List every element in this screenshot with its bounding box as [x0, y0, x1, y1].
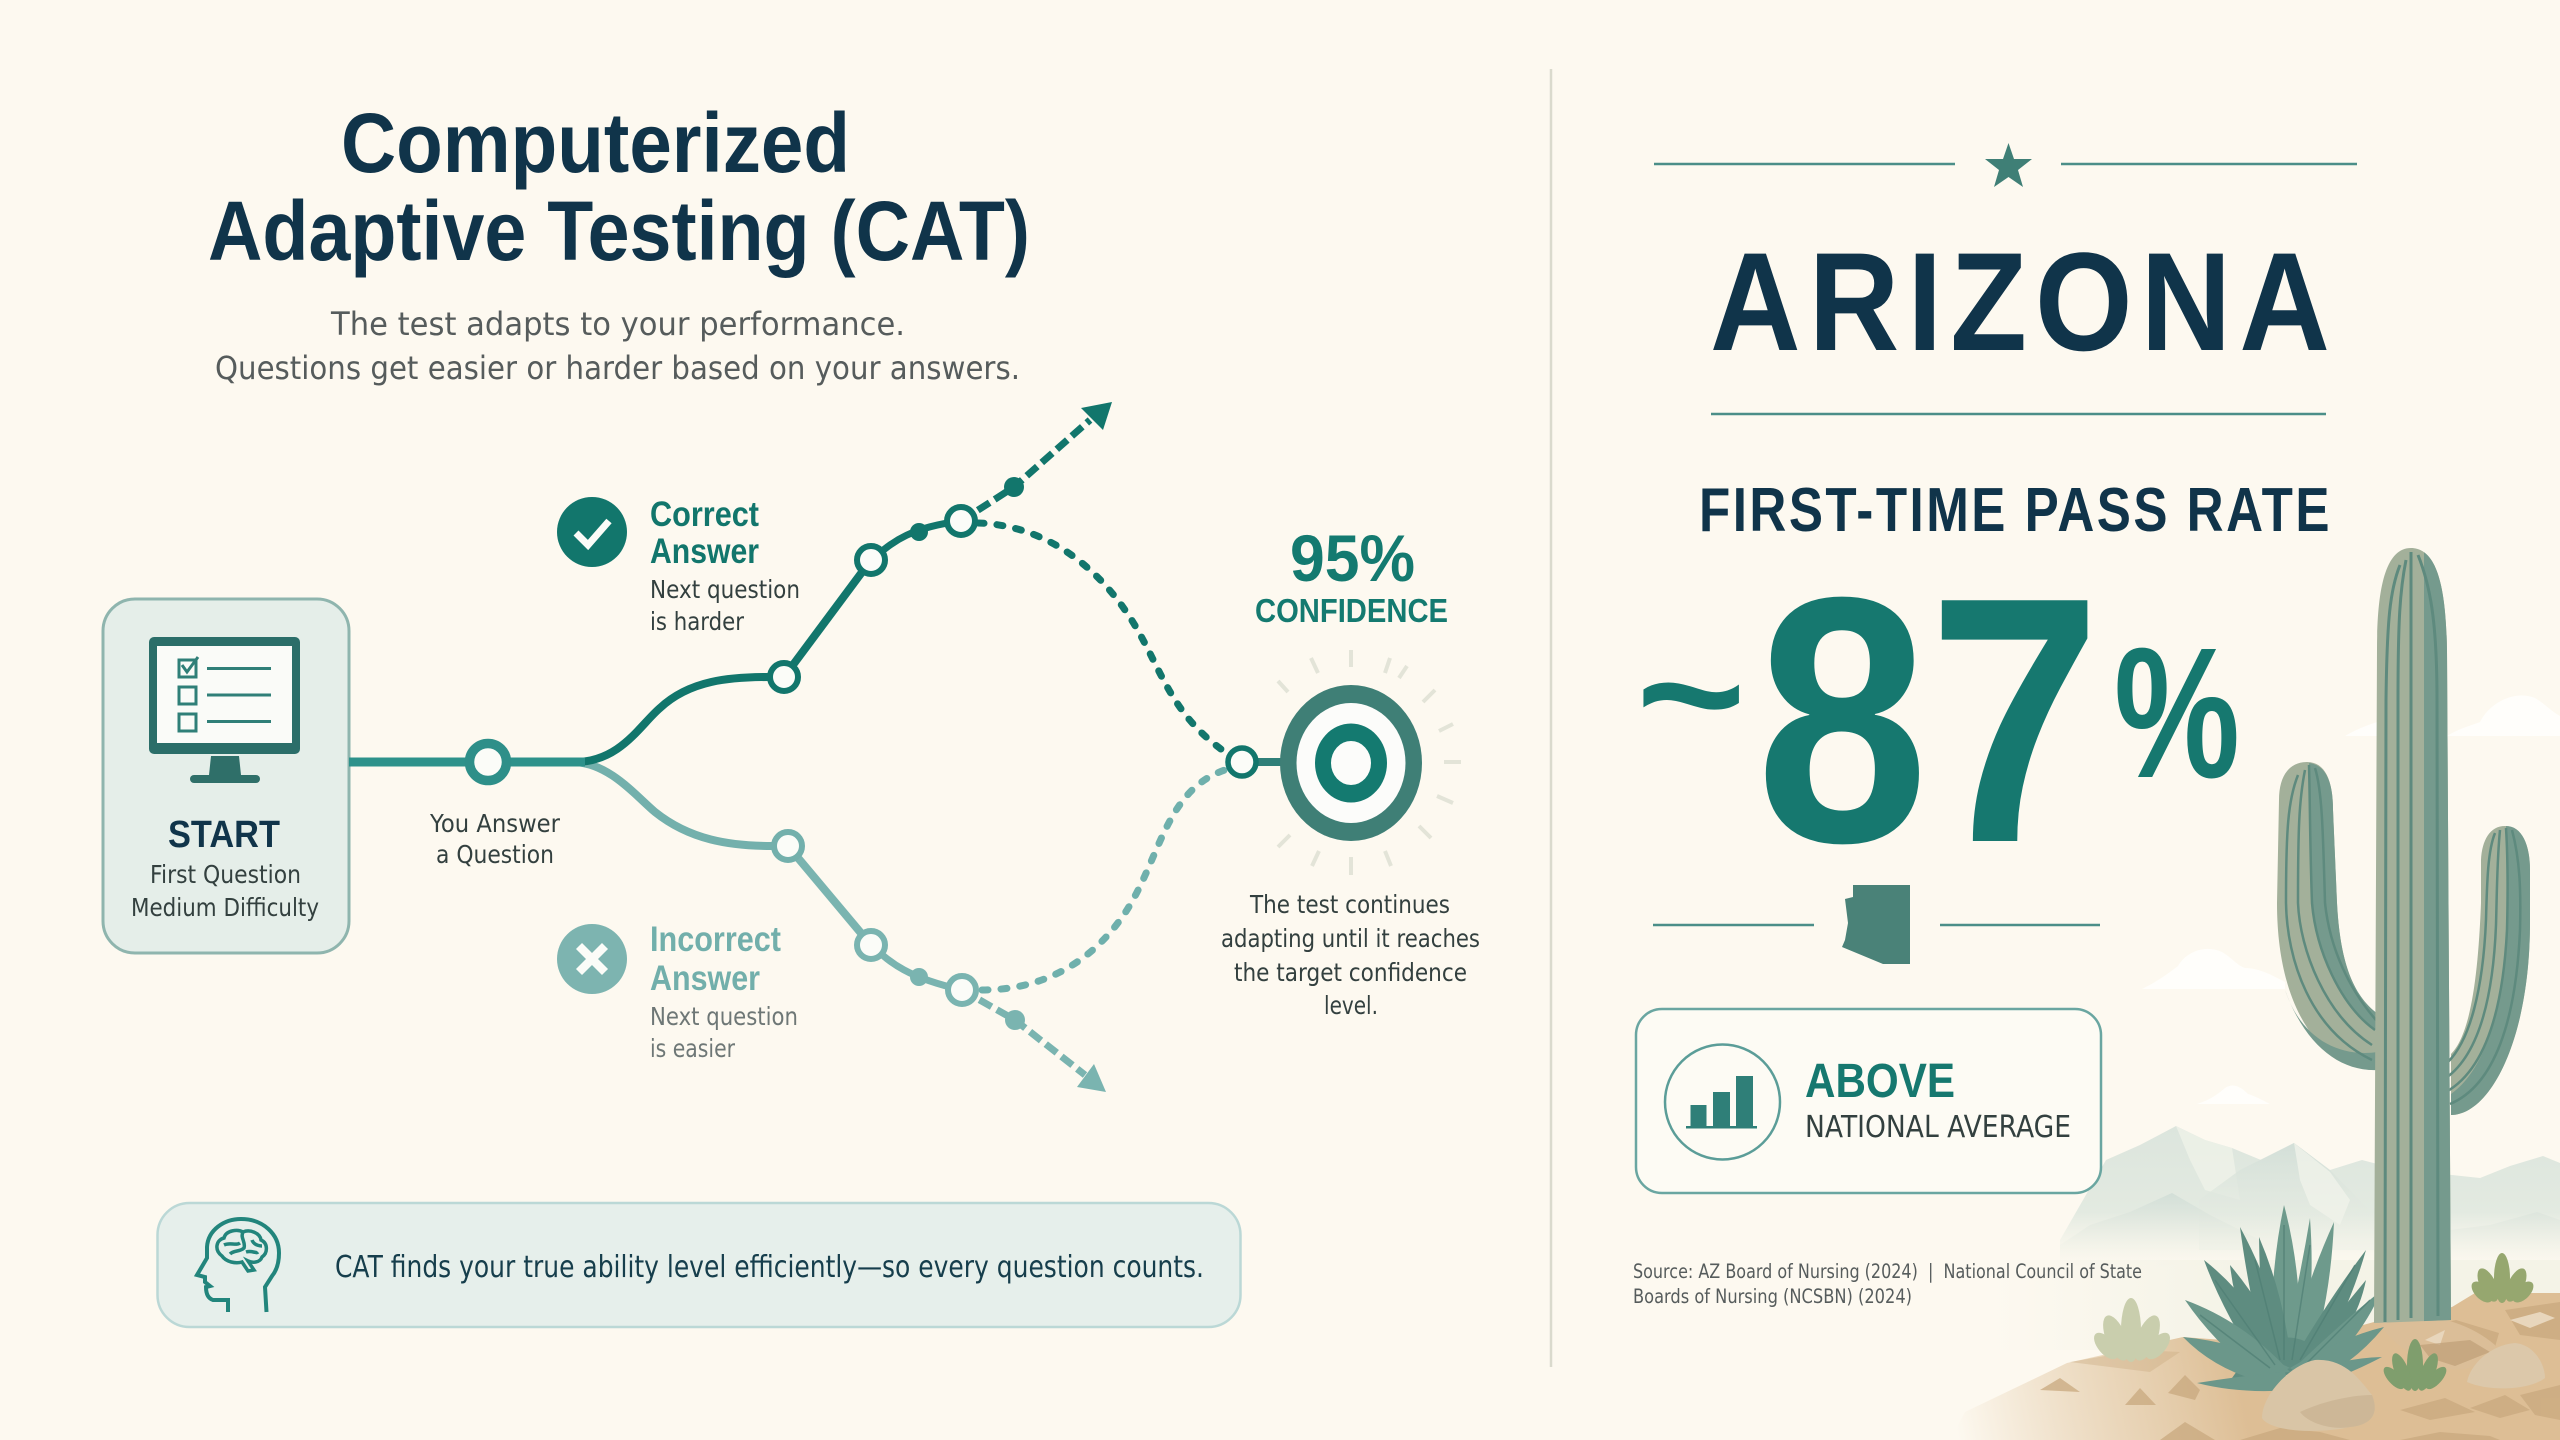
pass rate value: ~: [1636, 598, 1746, 790]
target description: the target confidence: [1234, 958, 1467, 987]
agave: [2183, 1205, 2384, 1391]
incorrect answer legend: [557, 920, 798, 1063]
correct heading: Answer: [650, 532, 759, 571]
star divider: [1654, 143, 2357, 187]
trunk: [2374, 540, 2456, 1330]
title: Adaptive Testing (CAT): [208, 184, 1030, 278]
confidence stat: CONFIDENCE: [1255, 592, 1448, 629]
right arm: [2446, 826, 2530, 1115]
icon: star: [1985, 143, 2032, 187]
pass rate value: [1636, 525, 2240, 916]
icon: cross: [557, 924, 627, 994]
saguaro cactus: [2277, 540, 2530, 1330]
incorrect note: [650, 1002, 798, 1063]
arizona divider: [1653, 885, 2100, 964]
icon: arizona state shape: [1842, 885, 1910, 964]
icon: bar chart: [1665, 1044, 1780, 1160]
confidence stat: 95%: [1290, 521, 1415, 595]
start line and first node: [349, 744, 585, 780]
target description: [1221, 890, 1480, 1020]
adaptive path diagram: [349, 402, 1225, 1092]
callout: [158, 1203, 1240, 1327]
incorrect heading: [650, 920, 781, 998]
title: Computerized: [341, 96, 850, 190]
incorrect heading: Incorrect: [650, 920, 781, 959]
correct heading: Correct: [650, 495, 759, 534]
above national average badge: [1636, 1009, 2101, 1193]
desert illustration: [1950, 540, 2560, 1440]
icon: head with brain: [197, 1219, 279, 1312]
correct heading: [650, 495, 759, 571]
target description: level.: [1324, 991, 1378, 1020]
target description: The test continues: [1249, 890, 1450, 919]
above national average badge: NATIONAL AVERAGE: [1805, 1110, 2071, 1145]
icon: check: [557, 497, 627, 567]
icon: computer monitor checklist: [149, 637, 300, 783]
source: [1633, 1260, 2142, 1308]
incorrect note: Next question: [650, 1002, 798, 1031]
correct note: Next question: [650, 575, 800, 604]
callout text: CAT finds your true ability level efficiently—so every question counts.: [335, 1250, 1204, 1285]
start description: Medium Difficulty: [131, 893, 319, 922]
incorrect note: is easier: [650, 1034, 736, 1063]
lower branch: [575, 762, 1225, 1092]
pass rate value: %: [2114, 610, 2240, 817]
left arm: [2277, 762, 2378, 1070]
you answer label: [429, 809, 561, 869]
subtitle: Questions get easier or harder based on your answers.: [215, 349, 1020, 387]
correct note: [650, 575, 800, 636]
incorrect heading: Answer: [650, 959, 760, 998]
subtitle: [215, 305, 1020, 387]
correct note: is harder: [650, 607, 745, 636]
title: [208, 96, 1030, 278]
icon: target: [1228, 650, 1461, 875]
start label: START: [168, 814, 280, 856]
state name: ARIZONA: [1710, 223, 2338, 380]
pass rate value: 87: [1756, 525, 2101, 916]
target description: adapting until it reaches: [1221, 924, 1480, 953]
correct answer legend: [557, 495, 800, 636]
badge text: ABOVE: [1805, 1055, 1955, 1108]
rocks: [2262, 1343, 2545, 1431]
clouds: [2142, 695, 2560, 1104]
upper branch: [575, 402, 1225, 762]
you answer label: You Answer: [429, 809, 561, 838]
panel: start: [103, 599, 349, 953]
start description: [131, 860, 319, 922]
confidence stat: [1255, 521, 1448, 629]
you answer label: a Question: [436, 840, 554, 869]
mountains: [2060, 1126, 2560, 1275]
source: Boards of Nursing (NCSBN) (2024): [1633, 1285, 1912, 1308]
source: Source: AZ Board of Nursing (2024) | National Council of State: [1633, 1260, 2142, 1283]
pass rate heading: FIRST-TIME PASS RATE: [1699, 476, 2332, 545]
start description: First Question: [150, 860, 301, 889]
subtitle: The test adapts to your performance.: [330, 305, 905, 343]
ground: [1950, 1260, 2560, 1440]
shrubs: [2090, 1253, 2537, 1393]
